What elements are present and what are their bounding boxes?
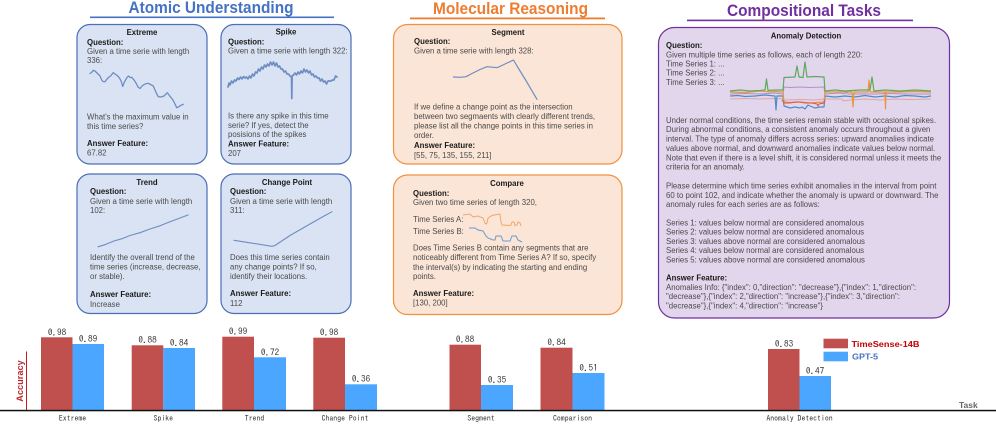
card title: Anomaly Detection: Anomaly Detection	[771, 32, 842, 40]
answer label: Answer Feature:	[230, 289, 291, 298]
question text continued: points.	[413, 272, 436, 281]
bars: Spike	[132, 336, 195, 422]
card title: Trend: Trend	[136, 178, 158, 187]
bars: Anomaly Detection: Anomaly Detection	[766, 414, 833, 422]
question text: 102:	[90, 206, 105, 215]
bars: Comparison: 0.51	[579, 364, 598, 373]
bars: Anomaly Detection: 0.83	[775, 340, 794, 349]
question text continued: order.	[414, 131, 434, 140]
instruction text: 60 to point 102, and indicate whether the anomaly is upward or downward. The	[666, 191, 938, 200]
bars: Trend	[222, 328, 286, 422]
bar chart: accuracy by task	[0, 328, 996, 422]
question text: Given a time serie with length 322:	[228, 46, 348, 56]
bars: Anomaly Detection: 0.47	[806, 367, 825, 376]
question text continued: Is there any spike in this time	[228, 112, 329, 120]
series rules: Series 4: values below normal are considered anomalous	[666, 246, 864, 255]
question text: Given a time serie with length 328:	[414, 46, 534, 56]
bars: Extreme: Extreme	[59, 414, 86, 422]
question text: Given multiple time series as follows, each of length 220:	[666, 50, 862, 60]
question text continued: this time series?	[87, 122, 144, 131]
question text: Given a time serie with length	[230, 197, 332, 206]
answer label: Answer Feature:	[666, 274, 727, 282]
series rules: Series 5: values above normal are considered anomalous	[666, 256, 865, 264]
question text: 311:	[230, 206, 245, 215]
question text continued: If we define a change point as the intersection	[414, 102, 573, 112]
x axis	[0, 410, 996, 411]
panel: Trend	[77, 174, 207, 314]
answer value: Increase	[90, 300, 120, 309]
bars: Trend: 0.99	[229, 328, 248, 337]
answer value: 207	[228, 149, 241, 158]
question text continued: or stable).	[90, 272, 125, 281]
panel: Anomaly Detection	[658, 28, 950, 318]
answer value: 67.82	[87, 148, 107, 158]
explanation text: criteria for an anomaly.	[666, 162, 745, 172]
question text continued: please list all the change points in this time series in	[414, 122, 593, 130]
answer value: "decrease"},{"index": 2,"direction": "increase"},{"index": 3,"direction":	[666, 292, 900, 301]
series B label: Time Series B:	[413, 227, 464, 236]
card title: Extreme: Extreme	[127, 28, 158, 37]
question label: Question:	[666, 41, 702, 50]
line chart: series B	[469, 228, 522, 242]
bars: Segment: 0.35	[488, 376, 507, 385]
explanation text: Under normal conditions, the time series remain stable with occasional spikes.	[666, 116, 936, 125]
question text continued: between two segmaents with clearly different trends,	[414, 112, 595, 121]
question label: Question:	[87, 38, 123, 47]
explanation text: Note that even if there is a level shift, it is considered normal unless it meets the	[666, 154, 941, 162]
bars: Segment: 0.88	[456, 336, 475, 345]
bars: Comparison	[540, 339, 604, 422]
question text continued: Does Time Series B contain any segments that are	[413, 244, 589, 252]
bars: Segment: Segment	[467, 414, 495, 422]
card title: Spike: Spike	[276, 28, 297, 36]
question text continued: Does this time series contain	[230, 253, 330, 262]
question text: Time Series 2: ...	[666, 68, 725, 78]
question label: Question:	[90, 187, 126, 196]
question text: Time Series 3: ...	[666, 78, 725, 87]
question label: Question:	[413, 189, 449, 198]
y axis: Accuracy: Accuracy	[15, 359, 25, 402]
series A label: Time Series A:	[413, 215, 463, 224]
section heading: Compositional Tasks: Compositional Tasks	[727, 2, 881, 20]
answer label: Answer Feature:	[90, 290, 151, 299]
series rules: Series 1: values below normal are considered anomalous	[666, 218, 864, 228]
line chart: spike series	[228, 62, 337, 98]
line chart: trend series	[98, 215, 188, 247]
x axis title: Task: Task	[959, 400, 978, 410]
bars: Spike: 0.88	[138, 336, 157, 345]
question text: Given two time series of length 320,	[413, 198, 537, 207]
bars: Anomaly Detection	[766, 340, 833, 422]
y axis: Accuracy	[15, 352, 27, 410]
question label: Question:	[414, 37, 450, 46]
bars: Trend: Trend	[245, 414, 264, 422]
legend	[824, 339, 920, 362]
bars: Comparison: 0.84	[547, 339, 566, 348]
answer label: Answer Feature:	[414, 141, 475, 150]
answer value: "decrease"},{"index": 4,"direction": "increase"}	[666, 302, 823, 310]
line chart: extreme series	[90, 70, 183, 108]
bars: Spike: Spike	[154, 414, 173, 422]
answer value: [130, 200]	[413, 298, 448, 308]
instruction text: anomaly rules for each series are as follows:	[666, 200, 820, 209]
card title: Compare: Compare	[490, 179, 525, 188]
card title: Change Point: Change Point	[262, 178, 313, 187]
answer value: [55, 75, 135, 155, 211]	[414, 151, 491, 160]
answer label: Answer Feature:	[413, 289, 474, 298]
section heading: Molecular Reasoning: Molecular Reasoning	[433, 0, 588, 18]
bars: Change Point: 0.36	[352, 375, 371, 384]
question text continued: time series (increase, decrease,	[90, 262, 201, 272]
bars: Spike: 0.84	[170, 339, 189, 348]
panel: Change Point	[221, 174, 351, 314]
question text: Given a time serie with length	[90, 197, 192, 206]
line chart: series A	[463, 214, 521, 226]
series rules: Series 2: values below normal are considered anomalous	[666, 228, 864, 236]
question text continued: noticeably different from Time Series A? If so, specify	[413, 253, 596, 262]
panel: Extreme	[77, 24, 207, 164]
answer label: Answer Feature:	[87, 139, 148, 148]
line chart: anomaly series	[730, 62, 931, 110]
answer label: Answer Feature:	[228, 140, 289, 148]
question text continued: serie? If yes, detect the	[228, 121, 309, 130]
card title: Segment: Segment	[492, 28, 525, 37]
question text: Time Series 1: ...	[666, 60, 725, 68]
instruction text: Please determine which time series exhibit anomalies in the interval from point	[666, 182, 937, 190]
bars: Trend: 0.72	[261, 349, 280, 358]
bars: Comparison: Comparison	[553, 414, 592, 422]
question label: Question:	[228, 38, 264, 46]
answer value: Anomalies Info: {"index": 0,"direction": "decrease"},{"index": 1,"direction":	[666, 283, 916, 292]
bars: Extreme: 0.98	[48, 328, 67, 338]
question label: Question:	[230, 187, 266, 196]
explanation text: During abnormal conditions, a consistent anomaly occurs throughout a given	[666, 125, 930, 134]
question text: Given a time serie with length	[87, 47, 189, 56]
series rules: Series 3: values above normal are considered anomalous	[666, 237, 865, 246]
bars: Change Point: Change Point	[322, 414, 368, 422]
legend: TimeSense-14B	[852, 339, 920, 349]
bars: Change Point	[313, 329, 377, 422]
explanation text: values above normal, and downward anomalies indicate values below normal.	[666, 144, 935, 153]
bars: Segment	[450, 336, 513, 422]
legend: GPT-5	[852, 352, 878, 362]
line chart: change point series	[234, 212, 332, 246]
line chart: segment series	[454, 60, 537, 99]
bars: Change Point: 0.98	[320, 329, 339, 338]
bars: Extreme: 0.89	[79, 335, 98, 344]
question text: 336:	[87, 56, 102, 65]
question text continued: identify their locations.	[230, 272, 307, 281]
bars: Extreme	[41, 328, 104, 422]
panel: Compare	[394, 175, 622, 314]
question text continued: What's the maximum value in	[87, 112, 189, 122]
answer value: 112	[230, 299, 242, 308]
panel: Spike	[221, 24, 351, 164]
question text continued: any change points? If so,	[230, 262, 317, 272]
panel: Segment	[394, 24, 622, 164]
question text continued: Identify the overall trend of the	[90, 253, 195, 262]
question text continued: posisions of the spikes	[228, 130, 307, 139]
explanation text: interval. The type of anomaly differs across series: upward anomalies indicate	[666, 134, 934, 144]
question text continued: the interval(s) by indicating the starting and ending	[413, 263, 587, 272]
